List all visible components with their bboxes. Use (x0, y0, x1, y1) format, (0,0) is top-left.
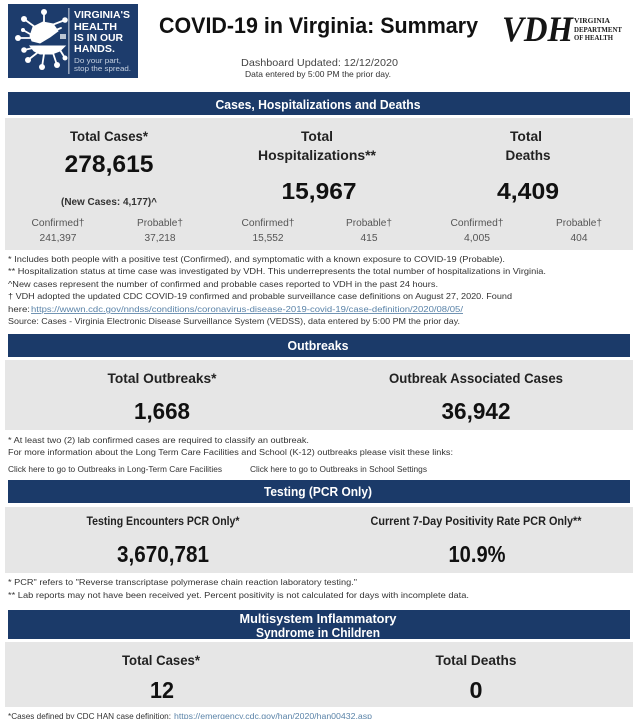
footnotes: outbreaks: * At least two (2) lab confirmed cases are required to classify an outbreak. (8, 435, 309, 445)
total cases: 241,397 (40, 233, 77, 244)
section header: outbreaks: Outbreaks (288, 339, 349, 353)
dashboard updated date: Dashboard Updated: 12/12/2020 (241, 57, 398, 69)
panel: testing: 3,670,781 (117, 541, 209, 567)
footnotes: cases: https://wwwn.cdc.gov/nndss/conditions/coronavirus-disease-2019-covid-19/case-definition/2020/08/05/ (31, 304, 464, 314)
panel: cases (5, 118, 633, 250)
logo text: Do your part, (74, 56, 121, 65)
panel: outbreaks (5, 360, 633, 430)
logo: VDH: DEPARTMENT (574, 27, 622, 34)
panel: outbreaks: Total Outbreaks* (108, 370, 217, 386)
footnotes: testing (8, 577, 469, 600)
panel: outbreaks: 36,942 (442, 398, 510, 424)
total cases: Total Cases* (70, 128, 149, 144)
total cases: (New Cases: 4,177)^ (61, 197, 157, 208)
data entry note: Data entered by 5:00 PM the prior day. (245, 69, 391, 79)
logo: VDH: VDH (502, 9, 574, 49)
panel: MIS-C: Total Cases* (122, 652, 201, 668)
footnotes: cases: Source: Cases - Virginia Electronic Disease Surveillance System (VEDSS), data entered by 5:00 PM the prior day. (8, 316, 460, 326)
total cases (32, 128, 183, 244)
total hospitalizations: 15,552 (252, 233, 284, 244)
section header: outbreaks (8, 334, 630, 357)
title: COVID-19 in Virginia: Summary (159, 13, 479, 38)
footnotes: cases: ^New cases represent the number of confirmed and probable cases reported to VDH in the past 24 hours. (8, 279, 438, 289)
footnote: MIS-C (8, 711, 372, 719)
footnotes: cases (8, 254, 546, 326)
footnotes: cases: here: (8, 304, 30, 314)
section header: cases (8, 92, 630, 115)
total deaths: 4,409 (497, 178, 559, 204)
section header: MIS-C: Syndrome in Children (256, 626, 380, 640)
logo text: HEALTH (74, 21, 117, 33)
total deaths (450, 128, 602, 244)
section header: cases: Cases, Hospitalizations and Deaths (216, 98, 421, 112)
logo text: VIRGINIA'S (74, 9, 130, 21)
total hospitalizations: 415 (360, 233, 378, 244)
total deaths: Deaths (506, 147, 551, 163)
total deaths: Confirmed† (450, 218, 504, 229)
footnotes: outbreaks: Click here to go to Outbreaks in School Settings (250, 464, 427, 474)
panel: testing: Testing Encounters PCR Only* (86, 516, 240, 528)
logo text: IS IN OUR (74, 32, 123, 44)
total deaths: Total (510, 128, 542, 144)
total deaths: 404 (570, 233, 588, 244)
total hospitalizations: Hospitalizations** (258, 147, 377, 163)
footnotes: cases: * Includes both people with a positive test (Confirmed), and symptomatic with a known exposure to COVID-19 (Probable). (8, 254, 505, 264)
total hospitalizations: Confirmed† (242, 218, 294, 229)
panel: MIS-C: 12 (150, 677, 174, 703)
total cases: Probable† (137, 218, 183, 229)
panel: testing: Current 7-Day Positivity Rate PCR Only** (370, 516, 582, 528)
panel: outbreaks: 1,668 (134, 398, 190, 424)
total hospitalizations (242, 128, 392, 244)
section header: testing (8, 480, 630, 503)
total deaths: Probable† (556, 218, 602, 229)
panel: MIS-C (5, 642, 633, 707)
section header: MIS-C (8, 610, 630, 640)
total hospitalizations: Probable† (346, 218, 392, 229)
footnotes: testing: ** Lab reports may not have been received yet. Percent positivity is not calculated for days with incomplete data. (8, 590, 469, 600)
logo: VDH (502, 9, 622, 49)
total hospitalizations: Total (301, 128, 333, 144)
footnotes: outbreaks: Click here to go to Outbreaks in Long-Term Care Facilities (8, 464, 222, 474)
footnotes: testing: * PCR" refers to "Reverse transcriptase polymerase chain reaction laboratory testing." (8, 577, 357, 587)
footnotes: cases: † VDH adopted the updated CDC COVID-19 confirmed and probable surveillance case definitions on August 27, 2020. Found (8, 291, 512, 301)
total cases: 278,615 (64, 151, 154, 178)
icon: virus in hands (15, 9, 68, 70)
section header: MIS-C: Multisystem Inflammatory (240, 612, 397, 626)
total cases: 37,218 (144, 233, 176, 244)
logo: VDH: VIRGINIA (574, 18, 610, 25)
panel: outbreaks: Outbreak Associated Cases (389, 370, 563, 386)
logo: VDH: OF HEALTH (574, 35, 614, 42)
total hospitalizations: 15,967 (282, 178, 356, 204)
panel: MIS-C: Total Deaths (436, 652, 517, 668)
footnotes: outbreaks: For more information about the Long Term Care Facilities and School (K-12) outbreaks please visit these links: (8, 447, 453, 457)
logo text: stop the spread. (74, 64, 131, 73)
footnotes: outbreaks (8, 435, 453, 474)
panel: MIS-C: 0 (470, 677, 482, 703)
total deaths: 4,005 (464, 233, 490, 244)
panel: testing (5, 507, 633, 573)
footnotes: cases: ** Hospitalization status at time case was investigated by VDH. This underrepresents the total number of hospitalizations in Virginia. (8, 266, 546, 276)
panel: testing: 10.9% (448, 541, 506, 567)
total cases: Confirmed† (32, 218, 84, 229)
logo text: HANDS. (74, 43, 115, 55)
logo: Virginia's Health Is In Our Hands (8, 4, 138, 78)
section header: testing: Testing (PCR Only) (264, 485, 372, 499)
logo text (74, 9, 131, 73)
